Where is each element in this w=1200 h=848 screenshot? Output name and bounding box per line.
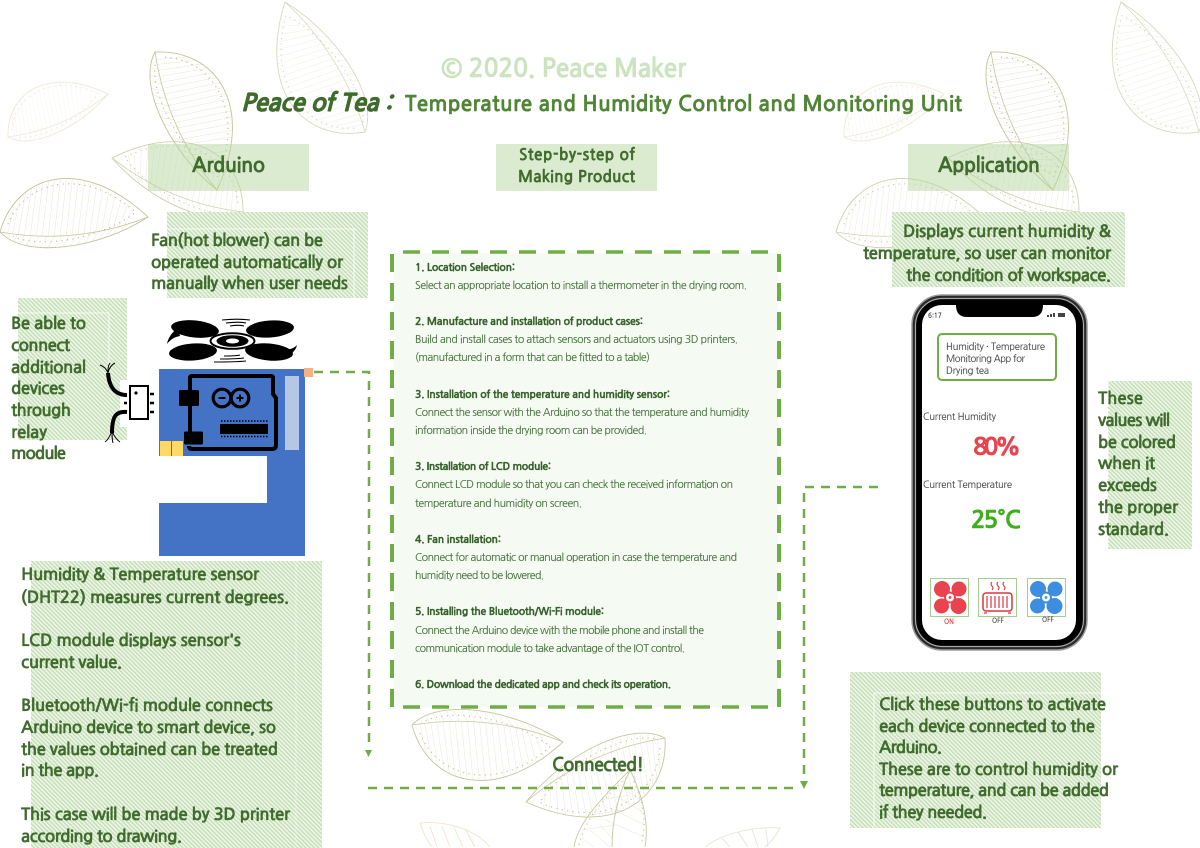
leaf: upper right middle xyxy=(971,32,1097,199)
app title box xyxy=(938,334,1056,380)
step 2: (manufactured in a form that can be fitted to a table) xyxy=(415,352,650,363)
button: cooling fan off xyxy=(1028,578,1066,623)
arrow: arduino to connected xyxy=(314,372,372,757)
value: temperature: 25°C xyxy=(971,508,1021,532)
leaf: lower left xyxy=(0,170,150,253)
heading: Step-by-step: Step-by-step of xyxy=(519,147,635,163)
step 2: 2. Manufacture and installation of product cases: xyxy=(415,316,643,327)
value: humidity: 80% xyxy=(973,435,1021,459)
phone notch xyxy=(956,305,1043,317)
icon: arduino ports xyxy=(179,390,203,444)
step 1: 1. Location Selection: xyxy=(415,262,515,273)
panel: step-by-step instructions xyxy=(392,252,779,708)
background leaves: right cluster xyxy=(830,0,1200,253)
step 2: Build and install cases to attach sensors and actuators using 3D printers. xyxy=(415,334,738,345)
heading: Application: Application xyxy=(938,155,1040,175)
callout: relay: connect xyxy=(11,337,71,354)
callout: application description: the condition of workspace. xyxy=(906,267,1111,284)
callout: colored values: These xyxy=(1098,390,1143,407)
callout: colored values: be colored xyxy=(1098,434,1176,451)
heading: Application xyxy=(908,144,1069,191)
callout: relay: through xyxy=(11,402,71,419)
callout: fan: Fan(hot blower) can be xyxy=(151,231,323,249)
connectors: yellow terminals xyxy=(160,441,183,456)
callout: fan: operated automatically or xyxy=(151,254,344,271)
app title box: Drying tea xyxy=(946,367,989,376)
leaf: faint bottom left partial xyxy=(420,823,490,847)
callout: sensor and module descriptions: (DHT22) measures current degrees. xyxy=(21,588,289,606)
callout: relay: additional xyxy=(11,359,86,376)
phone screen xyxy=(922,305,1076,640)
background leaves: bottom cluster xyxy=(407,703,780,847)
icon: arduino chip xyxy=(220,421,268,436)
label: current temperature: Current Temperature xyxy=(923,481,1012,490)
callout: sensor and module descriptions: in the app. xyxy=(21,762,99,779)
callout: colored values: values will xyxy=(1098,412,1170,429)
icon: fan blower xyxy=(167,318,297,363)
callout: buttons explanation: each device connected to the xyxy=(879,718,1095,735)
callout: sensor and module descriptions: the values obtained can be treated xyxy=(21,741,278,758)
step 3 LCD xyxy=(415,461,733,509)
title: Temperature and Humidity Control and Monitoring Unit xyxy=(405,94,962,115)
icon: relay module with wires xyxy=(100,363,154,443)
leaf: lower right xyxy=(831,170,986,253)
callout: buttons explanation: temperature, and can be added xyxy=(879,782,1109,799)
heading: Step-by-step: Making Product xyxy=(518,169,635,185)
callout: fan xyxy=(151,212,368,298)
callout: colored values xyxy=(1098,381,1192,549)
icon: arduino logo xyxy=(213,389,249,407)
title: Peace of Tea : xyxy=(241,91,395,115)
app title box: Humidity · Temperature xyxy=(946,343,1045,352)
callout: sensor and module descriptions: Bluetooth/Wi-fi module connects xyxy=(21,697,273,714)
leaf: faint bottom right partial xyxy=(705,828,780,847)
phone mockup xyxy=(912,295,1087,650)
leaf: top xyxy=(244,0,384,157)
step 4: humidity need to be lowered. xyxy=(415,570,544,581)
step 3 sensor xyxy=(415,389,749,436)
callout: sensor and module descriptions: LCD module displays sensor's xyxy=(21,632,241,649)
callout: application description: temperature, so user can monitor xyxy=(863,245,1112,262)
step 1: Select an appropriate location to install a thermometer in the drying room. xyxy=(415,280,747,291)
callout: sensor and module descriptions xyxy=(21,561,322,848)
icon: arduino outline xyxy=(189,376,276,449)
callout: buttons explanation: Click these buttons to activate xyxy=(879,696,1106,713)
heading: Arduino: Arduino xyxy=(192,155,265,175)
label: current humidity: Current Humidity xyxy=(923,413,997,422)
step 3 sensor: information inside the drying room can be provided. xyxy=(415,425,647,436)
step 3 sensor: Connect the sensor with the Arduino so that the temperature and humidity xyxy=(415,407,749,418)
step 3 LCD: Connect LCD module so that you can check the received information on xyxy=(415,479,733,490)
leaf: downward partial xyxy=(574,770,646,847)
button: heater off: OFF xyxy=(992,618,1004,624)
diagram: arduino case board xyxy=(159,368,313,556)
leaf: faint right xyxy=(830,62,950,151)
step 5: communication module to take advantage of the IOT control. xyxy=(415,643,685,654)
step 5: 5. Installing the Bluetooth/Wi-Fi module: xyxy=(415,606,604,617)
step 4 xyxy=(415,534,737,581)
callout: buttons explanation xyxy=(850,672,1119,828)
step 2 xyxy=(415,316,738,363)
callout: relay: devices xyxy=(11,380,65,397)
leaf: far right top xyxy=(1080,0,1200,157)
callout: colored values: standard. xyxy=(1098,521,1169,538)
step 1 xyxy=(415,262,747,291)
step 3 LCD: temperature and humidity on screen. xyxy=(415,498,582,509)
status bar xyxy=(928,313,1065,319)
callout: buttons explanation: Arduino. xyxy=(879,739,942,756)
callout: buttons explanation: if they needed. xyxy=(879,804,987,821)
app title box: Monitoring App for xyxy=(946,355,1026,364)
callout: application description: Displays current humidity & xyxy=(903,223,1112,240)
callout: application description xyxy=(863,212,1125,287)
step 5: Connect the Arduino device with the mobile phone and install the xyxy=(415,625,704,636)
strip: LCD module xyxy=(285,376,299,450)
step 3 sensor: 3. Installation of the temperature and humidity sensor: xyxy=(415,389,670,400)
callout: sensor and module descriptions: current value. xyxy=(21,654,122,671)
callout: buttons explanation: These are to control humidity or xyxy=(879,761,1119,778)
callout: relay: relay xyxy=(11,424,47,441)
button: heater off xyxy=(978,578,1016,624)
heading: Step-by-step xyxy=(496,144,657,191)
callout: colored values: the proper xyxy=(1098,499,1179,516)
callout: sensor and module descriptions: Arduino device to smart device, so xyxy=(21,719,276,736)
step 4: Connect for automatic or manual operation in case the temperature and xyxy=(415,552,737,563)
callout: colored values: exceeds xyxy=(1098,477,1157,494)
background leaves: left cluster xyxy=(0,0,384,253)
step 3 LCD: 3. Installation of LCD module: xyxy=(415,461,551,472)
arrow: connected to application xyxy=(368,487,878,789)
button: fan on: ON xyxy=(944,619,954,625)
phone body xyxy=(912,295,1087,650)
leaf: application overlap xyxy=(940,117,1096,231)
leaf: upper middle xyxy=(135,32,261,199)
leaf: behind connected label xyxy=(517,718,685,846)
callout: sensor and module descriptions: according to drawing. xyxy=(21,828,182,845)
callout: relay: Be able to xyxy=(11,315,86,332)
copyright line: © 2020. Peace Maker xyxy=(441,56,687,81)
status bar: 6:17 xyxy=(928,313,942,319)
leaf: bottom left of center xyxy=(407,703,565,790)
step 5 xyxy=(415,606,704,654)
leaf: arduino overlap xyxy=(104,117,260,231)
callout: sensor and module descriptions: Humidity & Temperature sensor xyxy=(21,566,260,583)
callout: sensor and module descriptions: This case will be made by 3D printer xyxy=(21,806,291,823)
button: fan on xyxy=(930,578,968,625)
button: cooling fan off: OFF xyxy=(1042,617,1054,623)
connector: orange terminal xyxy=(304,368,313,377)
step 6: 6. Download the dedicated app and check its operation. xyxy=(415,679,671,690)
heading: Arduino xyxy=(148,144,309,191)
title xyxy=(241,91,962,115)
callout: fan: manually when user needs xyxy=(151,275,348,292)
leaf: faint left xyxy=(0,62,114,151)
step 4: 4. Fan installation: xyxy=(415,534,501,545)
callout: relay: module xyxy=(11,445,66,462)
callout: relay xyxy=(11,298,130,462)
callout: colored values: when it xyxy=(1098,455,1156,472)
label: connected: Connected! xyxy=(552,756,644,774)
